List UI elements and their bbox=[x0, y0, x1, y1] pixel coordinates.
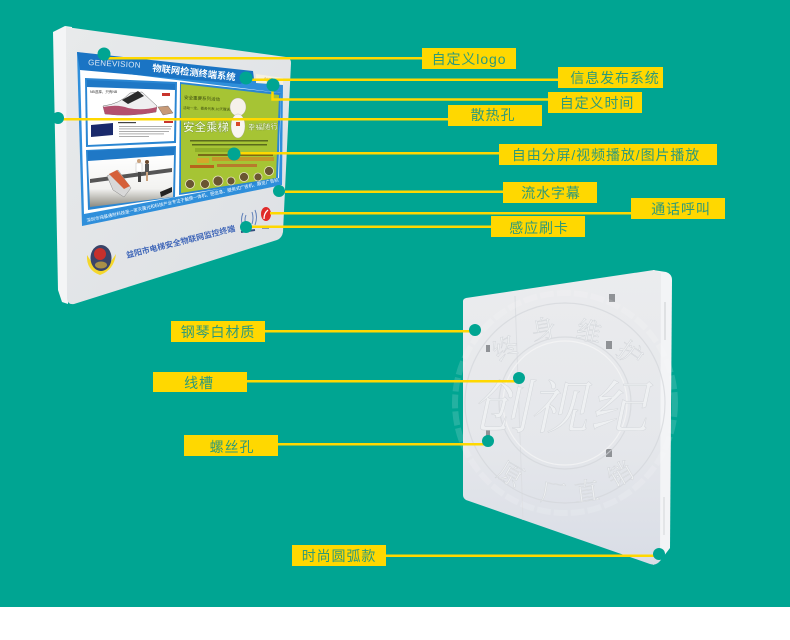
callout: 自定义logo bbox=[98, 48, 516, 69]
callout: 流水字幕 bbox=[273, 182, 597, 203]
screw holes bbox=[486, 294, 615, 457]
watermark seal: 直 bbox=[573, 476, 601, 508]
right green panel bbox=[179, 82, 281, 195]
character row bbox=[186, 166, 274, 188]
callout: 线槽: 线槽 bbox=[184, 375, 214, 391]
callout: 感应刷卡 bbox=[240, 216, 585, 237]
device side edge bbox=[53, 26, 72, 304]
horizon strip bbox=[90, 168, 172, 183]
hand with pen bbox=[158, 106, 173, 115]
shoe illustration bbox=[103, 92, 157, 115]
front terminal device bbox=[53, 26, 291, 304]
callout: 流水字幕: 流水字幕 bbox=[521, 185, 581, 201]
national emblem bbox=[87, 245, 116, 275]
callout: 时尚圆弧款: 时尚圆弧款 bbox=[302, 548, 376, 564]
callout: 感应刷卡: 感应刷卡 bbox=[509, 220, 569, 236]
watermark seal: 身 bbox=[529, 314, 558, 346]
left lower panel bbox=[86, 146, 176, 210]
callout: 螺丝孔: 螺丝孔 bbox=[210, 439, 254, 455]
callout: 自定义时间 bbox=[266, 78, 642, 113]
terminal name: 益阳市电梯安全物联网监控终端 bbox=[125, 223, 236, 260]
callout: 散热孔 bbox=[52, 105, 542, 126]
device side edge bbox=[653, 270, 672, 565]
callout: 信息发布系统: 信息发布系统 bbox=[570, 70, 660, 86]
header banner bbox=[77, 52, 254, 84]
clock box bbox=[256, 74, 283, 85]
watermark seal: 原 bbox=[492, 457, 528, 493]
callout: 自由分屏/视频播放/图片播放 bbox=[228, 144, 717, 165]
watermark seal: 纪 bbox=[587, 377, 659, 441]
device rear face bbox=[463, 270, 661, 565]
left upper panel: NB选择，只有NB bbox=[90, 89, 118, 94]
callout: 通话呼叫 bbox=[270, 198, 725, 219]
logo text: GENEVISION bbox=[88, 58, 141, 70]
callout: 散热孔: 散热孔 bbox=[471, 107, 515, 123]
right green panel: 安全重要系列活动 bbox=[184, 94, 221, 103]
screen bbox=[77, 52, 283, 226]
system title: 物联网检测终端系统 bbox=[152, 62, 237, 83]
ticker text: 深圳市纯基通附科技是一家灭菌光和科技产业专注于触摸一体机、把信息、服务式广告机、展览广告机 bbox=[86, 176, 280, 224]
watermark seal: 创 bbox=[469, 377, 541, 441]
watermark seal bbox=[455, 293, 675, 513]
callout: 自定义logo: 自定义logo bbox=[432, 51, 506, 67]
callout: 时尚圆弧款 bbox=[292, 545, 665, 566]
watermark seal: 护 bbox=[611, 336, 648, 373]
watermark seal: 维 bbox=[574, 316, 604, 348]
people bbox=[136, 163, 142, 172]
cable groove bbox=[515, 296, 523, 520]
callout: 自定义时间: 自定义时间 bbox=[560, 95, 634, 111]
rear device bbox=[463, 270, 672, 565]
right green panel: 幸福随行 bbox=[248, 121, 279, 132]
icon: card reader waves bbox=[241, 210, 256, 232]
watermark seal: 厂 bbox=[539, 479, 567, 510]
callout: 线槽 bbox=[153, 372, 525, 392]
slogan: 安全乘梯 bbox=[183, 120, 229, 134]
left upper panel bbox=[85, 78, 177, 147]
watermark seal: 销 bbox=[603, 457, 639, 493]
callout: 螺丝孔 bbox=[184, 435, 494, 456]
watermark seal: 终 bbox=[488, 331, 524, 367]
callout: 信息发布系统 bbox=[240, 67, 663, 88]
icon: red phone bbox=[261, 207, 271, 228]
right green panel: 活动一定，看各代表,10天赠送系列 bbox=[183, 105, 237, 112]
sponsor rows bbox=[190, 140, 268, 142]
screen: 时间 bbox=[264, 76, 274, 84]
callout: 通话呼叫: 通话呼叫 bbox=[651, 201, 711, 217]
callout: 钢琴白材质 bbox=[171, 321, 481, 342]
watermark seal: 视 bbox=[527, 377, 599, 441]
callout: 自由分屏/视频播放/图片播放: 自由分屏/视频播放/图片播放 bbox=[512, 147, 700, 163]
photo thumbnail bbox=[91, 123, 113, 137]
mascot bbox=[230, 98, 246, 138]
device front face bbox=[66, 27, 291, 304]
vents bbox=[664, 302, 666, 340]
callout: 钢琴白材质: 钢琴白材质 bbox=[181, 324, 255, 340]
shoe illustration bbox=[107, 170, 131, 197]
